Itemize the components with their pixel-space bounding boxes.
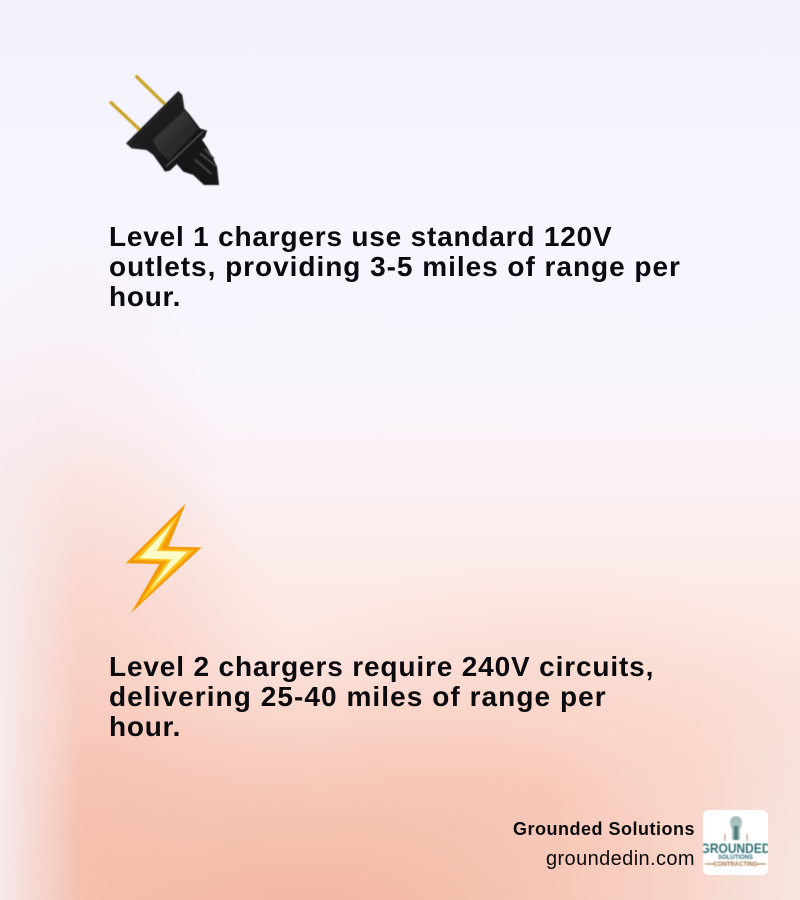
icon: lightning bolt bbox=[126, 504, 202, 613]
logo bbox=[703, 810, 768, 875]
text: level 2 description: hour. bbox=[109, 711, 181, 742]
text: level 1 description: outlets, providing 3-5 miles of range per bbox=[109, 251, 681, 282]
icon: electric plug bbox=[108, 74, 220, 186]
logo: SOLUTIONS bbox=[718, 855, 753, 861]
logo: CONTRACTING bbox=[713, 862, 758, 868]
text: level 1 description: Level 1 chargers use standard 120V bbox=[109, 221, 612, 252]
website: groundedin.com bbox=[546, 848, 695, 870]
text: level 2 description: Level 2 chargers require 240V circuits, bbox=[109, 651, 654, 682]
text: level 1 description bbox=[109, 221, 681, 312]
brand name: Grounded Solutions bbox=[513, 819, 695, 839]
text: level 2 description bbox=[109, 651, 654, 742]
text: level 2 description: delivering 25-40 miles of range per bbox=[109, 681, 607, 712]
text: level 1 description: hour. bbox=[109, 281, 181, 312]
